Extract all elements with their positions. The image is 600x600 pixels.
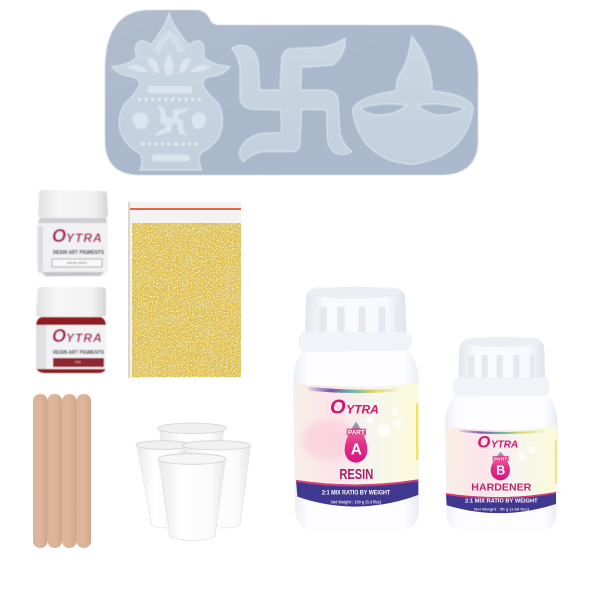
right cup (182, 441, 251, 528)
part B drop badge: PART (494, 457, 507, 463)
panel: hardener bottle part B (445, 337, 558, 532)
hardener blue band (446, 492, 556, 513)
part A drop badge: A (351, 442, 362, 459)
resin label: OYTRA (330, 396, 379, 418)
pigment label text: PASTEL WHITE (67, 261, 87, 265)
glitter fill (132, 223, 241, 377)
jar lid (36, 287, 106, 317)
panel: glitter pack (128, 202, 241, 378)
front cup (158, 454, 226, 540)
icon: diya cavity (352, 36, 473, 164)
part A drop badge (345, 422, 367, 463)
pigment label text (52, 326, 104, 367)
panel: white pigment jar (37, 190, 108, 277)
resin label (295, 383, 418, 502)
resin blue band: Net Weight : 100 g (3.3 floz) (331, 499, 381, 504)
pigment label text: OYTRA (52, 326, 103, 346)
resin blue band (296, 479, 418, 507)
resin label: RESIN (339, 467, 373, 483)
panel: silicone mould (105, 10, 478, 175)
icon: kalash cavity (112, 13, 230, 170)
part B drop badge: B (496, 464, 505, 478)
left cup (136, 441, 191, 528)
pigment label text: RED (75, 360, 81, 364)
panel: paper cups (136, 423, 251, 540)
part B drop badge (491, 452, 510, 480)
pigment label text (52, 226, 104, 267)
hardener blue band: 2:1 MIX RATIO BY WEIGHT (465, 498, 538, 504)
hardener label: HARDENER (471, 483, 531, 494)
hardener label: OYTRA (477, 433, 518, 452)
pigment label text: RESIN ART PIGMENTS (53, 350, 104, 356)
back cup (158, 423, 226, 485)
pigment label text: OYTRA (52, 226, 103, 246)
hardener blue band: Net Weight : 50 g (1.69 floz) (474, 506, 530, 511)
panel: wooden sticks (33, 394, 91, 548)
icon: swastika cavity (232, 38, 352, 162)
panel: resin bottle part A (293, 287, 419, 532)
pigment label text: RESIN ART PIGMENTS (53, 250, 104, 256)
part A drop badge: PART (348, 429, 365, 436)
resin blue band: 2:1 MIX RATIO BY WEIGHT (322, 489, 390, 496)
panel: red pigment jar (36, 287, 106, 373)
jar lid (38, 190, 108, 218)
hardener label (446, 426, 557, 502)
